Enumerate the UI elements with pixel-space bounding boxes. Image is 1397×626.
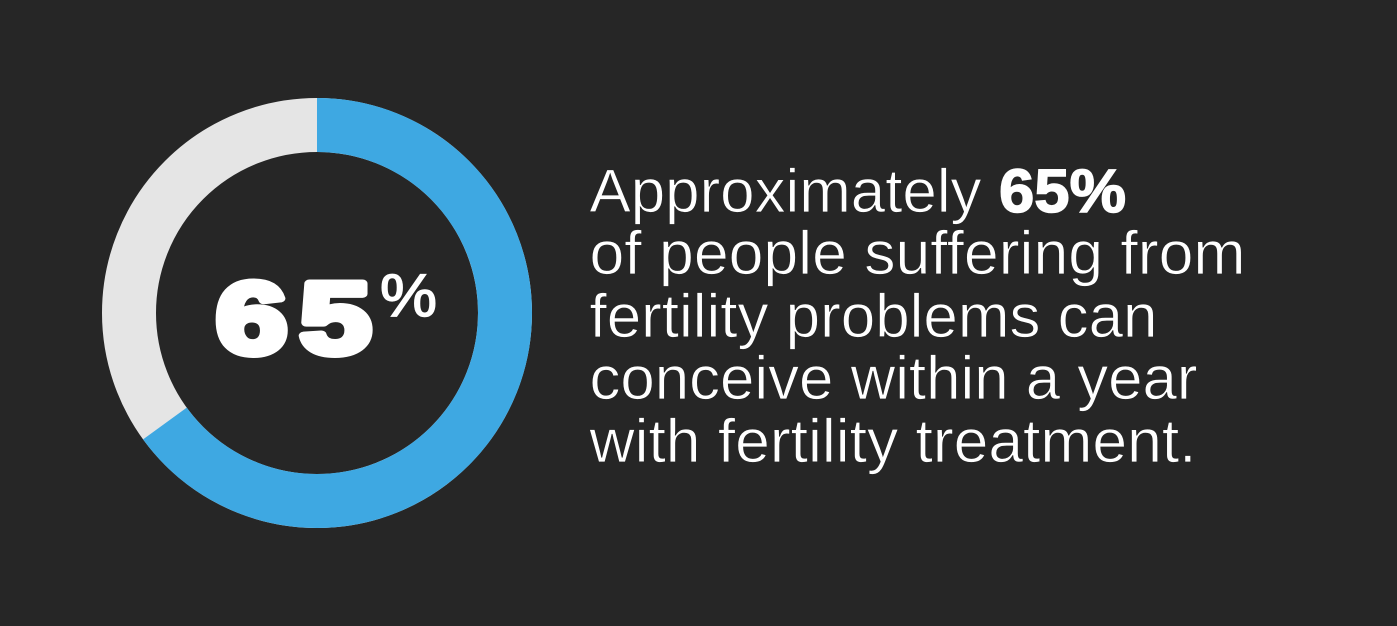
line 2: of people suffering from (590, 219, 1246, 287)
big number: 65 (216, 262, 371, 375)
line 3: fertility problems can (590, 282, 1158, 350)
highlighted 65%: 65% (999, 157, 1126, 225)
line 1: Approximately (590, 157, 982, 225)
donut remainder segment (129, 125, 505, 501)
donut chart: 65 percent (129, 125, 505, 501)
donut 65 percent segment (165, 125, 505, 501)
donut centre value (216, 262, 437, 375)
line 4: conceive within a year (590, 344, 1198, 412)
description text (588, 157, 1246, 475)
line 5: with fertility treatment. (588, 407, 1196, 475)
percent sign: % (380, 262, 437, 329)
